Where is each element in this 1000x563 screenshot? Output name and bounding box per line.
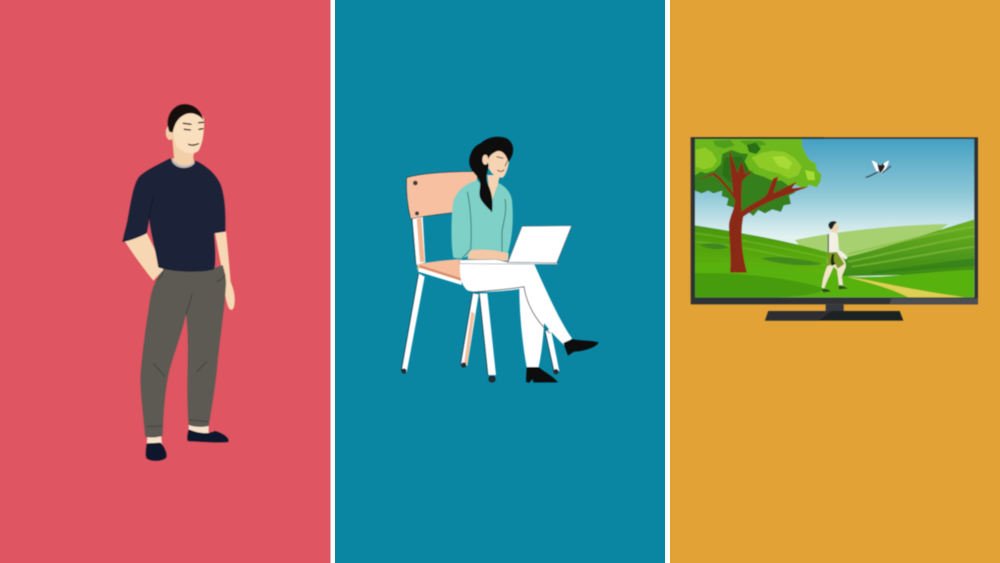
woman: teal blouse (451, 180, 513, 258)
woman: face (487, 148, 509, 178)
figure: standing man (123, 104, 235, 461)
scene: flying bird (866, 161, 891, 177)
chair: leg feet (401, 362, 559, 383)
man: right hand and forearm (215, 232, 235, 310)
man: left forearm in pocket (124, 233, 163, 281)
television (691, 137, 978, 321)
woman: crossed leg white trousers (460, 262, 572, 345)
man: face (173, 110, 204, 153)
panel: orange background (670, 0, 1000, 563)
man: grey undershirt collar (171, 157, 195, 168)
man: neck (171, 137, 197, 168)
chair: backrest (406, 172, 477, 219)
tv: stand base (765, 311, 903, 321)
woman: hair (469, 137, 513, 212)
man: hair (168, 104, 203, 133)
panel: teal background (335, 0, 665, 563)
scene: yellow path (847, 277, 965, 297)
man: shoe right (187, 425, 229, 442)
chair: back uprights (412, 216, 425, 265)
scene: left hill (695, 225, 842, 280)
tv: frame (691, 137, 978, 304)
man: navy sweater (123, 158, 225, 272)
man: eyes and brows (183, 122, 204, 145)
scene: foreground grass (695, 270, 975, 298)
scene: distant pale hill (794, 224, 948, 258)
scene: tree canopy (695, 139, 822, 216)
panel: red background (0, 0, 330, 563)
woman: forearm (467, 250, 509, 261)
chair: back legs (401, 273, 425, 372)
woman: upper shoe (563, 339, 599, 356)
woman: back leg white trousers (519, 285, 545, 367)
laptop: screen (508, 226, 572, 263)
scene: sky (695, 139, 974, 297)
man: ear (166, 125, 174, 140)
woman: lower shoe (526, 367, 558, 383)
tv: stand neck (826, 304, 844, 311)
scene: walking person (822, 221, 848, 292)
scene: tree trunk and branches (697, 150, 809, 273)
man: shoe left (146, 437, 166, 461)
figure: woman sitting on chair with laptop (401, 137, 599, 383)
woman: neck (487, 175, 500, 200)
scene: right hill (832, 219, 974, 277)
laptop: base (459, 259, 558, 264)
tv: screen scene (695, 139, 974, 297)
man: trousers (141, 265, 226, 438)
chair: seat (417, 259, 462, 282)
